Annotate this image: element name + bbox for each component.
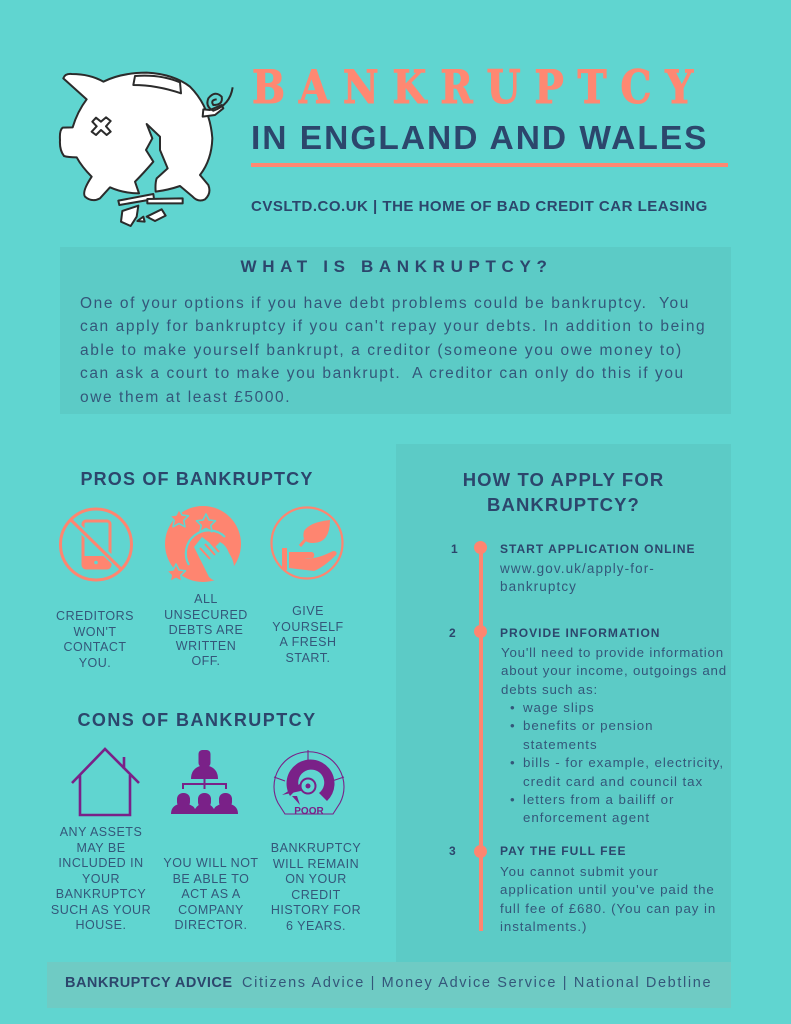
heading: pros of bankruptcy: PROS OF BANKRUPTCY [80,469,314,489]
text: unsecured debts written off: DEBTS ARE [169,623,243,637]
text: assets: MAY BE [76,840,126,854]
step 3: full fee of £680. (You can pay in [500,901,716,916]
text: credit history: WILL REMAIN [273,856,359,870]
text block: definition: can apply for bankruptcy if you can't repay your debts. In addition to being [80,318,706,335]
text block: definition: owe them at least £5000. [80,389,291,406]
text: company director: BE ABLE TO [173,872,249,886]
text: assets [51,825,151,932]
step 2: 2 [449,626,456,640]
text: fresh start: START. [286,650,330,664]
text: fresh start: YOURSELF [272,620,344,634]
heading: how to apply: BANKRUPTCY? [487,494,640,515]
text: company director: DIRECTOR. [174,918,248,932]
timeline line [479,547,483,931]
step 2 [449,626,727,825]
text: credit history [271,841,361,932]
step 1: START APPLICATION ONLINE [500,542,696,556]
text: unsecured debts written off: UNSECURED [164,608,248,622]
text: assets: INCLUDED IN [58,856,144,870]
step 3: PAY THE FULL FEE [500,844,627,858]
title underline [251,163,728,167]
step 1: bankruptcy [500,579,577,594]
step 2: enforcement agent [523,810,650,825]
step 3 [449,844,716,934]
text: fresh start [272,604,344,664]
text: fresh start: A FRESH [280,635,336,649]
tagline: CVSLTD.CO.UK | THE HOME OF BAD CREDIT CAR LEASING [251,198,708,215]
text: credit history: CREDIT [291,888,341,902]
step 2: • [510,792,516,807]
text block: definition [80,295,706,406]
text: assets: BANKRUPTCY [56,887,146,901]
subtitle: In England and Wales: IN ENGLAND AND WALES [251,120,709,157]
text: fresh start: GIVE [292,604,324,618]
step 2: benefits or pension [523,718,653,733]
text: unsecured debts written off: ALL [194,592,218,606]
step 1 [451,542,696,594]
text: credit history: 6 YEARS. [286,918,346,932]
icon: hand with leaf [270,506,344,580]
icon: no phone [59,508,133,582]
step 2: about your income, outgoings and [501,663,727,678]
text: assets: ANY ASSETS [60,825,142,839]
heading: cons of bankruptcy: CONS OF BANKRUPTCY [77,710,317,730]
step 3: instalments.) [500,919,587,934]
heading: how to apply [463,469,664,515]
panel: how to apply [396,444,731,962]
step 3: You cannot submit your [500,864,659,879]
step 2: PROVIDE INFORMATION [500,626,660,640]
timeline dots [474,541,487,858]
icon: company hierarchy [171,750,238,814]
text: company director: COMPANY [178,902,244,916]
text block: definition: can ask a court to make you bankrupt. A creditor can only do this if you [80,365,685,382]
text: company director [163,856,259,932]
step 2: • [510,718,516,733]
text block: definition: One of your options if you have debt problems could be bankruptcy. You [80,295,690,312]
text block: definition: able to make yourself bankrupt, a creditor (someone you owe money to) [80,342,683,359]
text: unsecured debts written off [164,592,248,668]
text: creditors won't contact you: WON'T [73,624,117,638]
footer heading: BANKRUPTCY ADVICE [65,975,233,991]
text: creditors won't contact you: YOU. [79,656,111,670]
text: assets: HOUSE. [76,918,126,932]
step 2: bills - for example, electricity, [523,755,724,770]
step 2: wage slips [523,700,595,715]
step 2: debts such as: [501,682,598,697]
text: assets: SUCH AS YOUR [51,902,151,916]
step 2: • [510,700,516,715]
text: credit history: HISTORY FOR [271,903,361,917]
text: credit history: BANKRUPTCY [271,841,361,855]
step 1: 1 [451,542,458,556]
step 3: 3 [449,844,456,858]
icon: poor credit gauge [273,750,345,817]
step 2: • [510,755,516,770]
text: company director: YOU WILL NOT [163,856,259,870]
text: assets: YOUR [82,872,120,886]
step 2: You'll need to provide information [501,645,724,660]
text: creditors won't contact you: CREDITORS [56,609,134,623]
heading: how to apply: HOW TO APPLY FOR [463,469,664,490]
icon: poor credit gauge: POOR [294,806,324,817]
icon: clean hands with stars [165,506,241,582]
text: unsecured debts written off: WRITTEN [176,638,236,652]
text: credit history: ON YOUR [285,872,347,886]
step 2: statements [523,737,598,752]
heading: what is bankruptcy: WHAT IS BANKRUPTCY? [241,257,552,276]
text: unsecured debts written off: OFF. [191,654,221,668]
step 1: www.gov.uk/apply-for- [500,561,655,576]
text: company director: ACT AS A [181,887,241,901]
step 3: application until you've paid the [500,882,715,897]
text: creditors won't contact you [56,609,134,670]
step 2: credit card and council tax [523,774,703,789]
step 2: letters from a bailiff or [523,792,674,807]
icon: house [71,747,140,816]
icon: broken piggy bank [58,72,234,227]
footer links: Citizens Advice | Money Advice Service | National Debtline [242,975,712,991]
panel: what is bankruptcy [60,247,731,414]
text: creditors won't contact you: CONTACT [64,640,126,654]
title: Bankruptcy: BANKRUPTCY [252,60,707,114]
footer: bankruptcy advice [47,962,731,1008]
